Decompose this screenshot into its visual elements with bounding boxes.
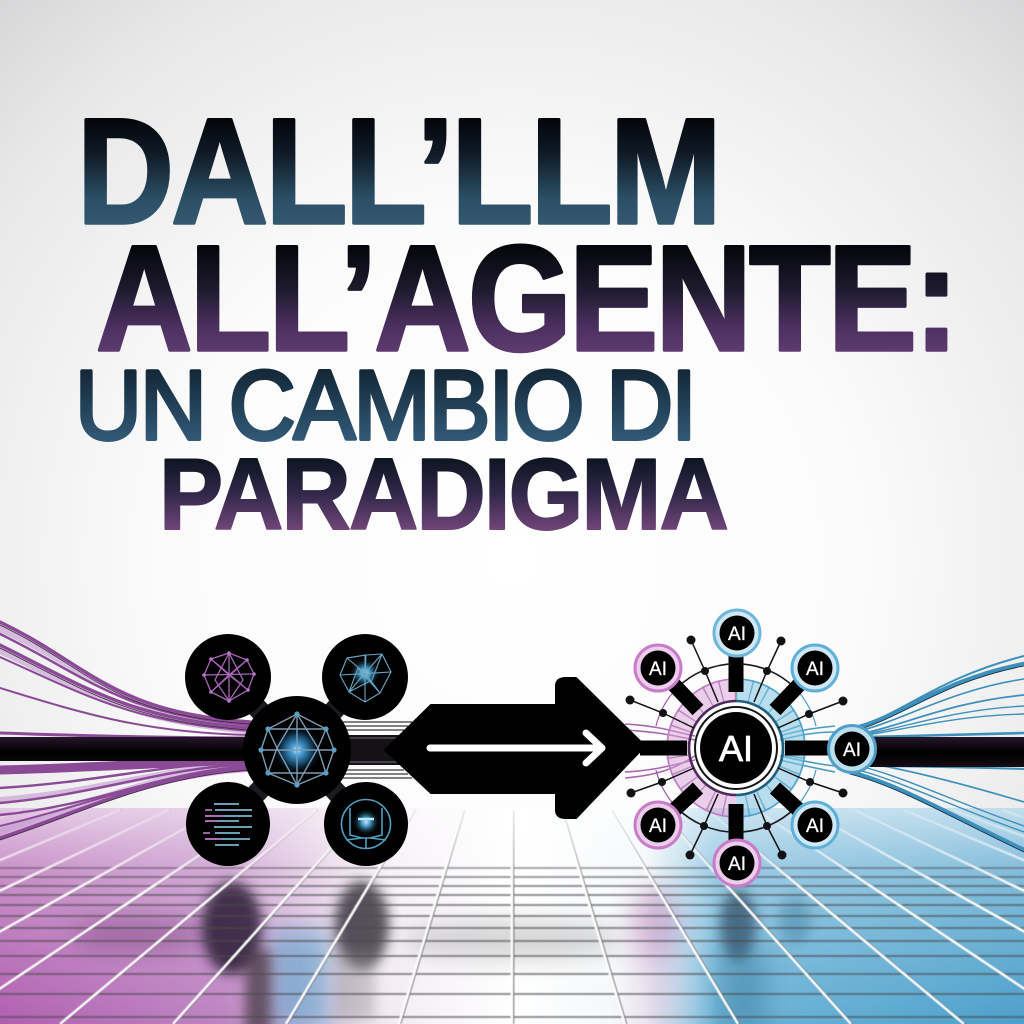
reflective floor grid	[0, 808, 1024, 1024]
AI node top: AI	[728, 624, 746, 645]
AI node bottom right: AI	[806, 816, 824, 837]
node: blue network	[322, 634, 408, 720]
title line 3: UN CAMBIO DI	[75, 350, 695, 460]
right blue data streams	[850, 656, 1024, 852]
node: centre polyhedron	[243, 696, 351, 804]
thick spokes	[640, 633, 852, 863]
connectors	[228, 677, 366, 824]
central AI node	[700, 712, 772, 784]
AI node top left	[635, 645, 681, 691]
satellite links	[630, 640, 843, 855]
satellite dots	[626, 636, 848, 860]
agent hub network	[625, 610, 876, 886]
node: blue chip	[324, 782, 408, 866]
AI node top left: AI	[649, 659, 667, 680]
AI node right: AI	[843, 740, 861, 761]
transformation arrow	[385, 678, 645, 818]
AI node bottom	[714, 840, 760, 886]
central black band left	[0, 737, 250, 761]
outer ring arcs	[656, 664, 816, 832]
title line 1: DALL’LLM	[77, 87, 719, 255]
LLM hub cluster	[185, 634, 408, 866]
left purple data streams	[0, 622, 250, 840]
node: text lines	[186, 782, 270, 866]
AI node bottom left	[635, 802, 681, 848]
central AI node: AI	[719, 728, 753, 769]
title line 4: PARADIGMA	[159, 439, 727, 551]
AI node top right	[792, 645, 838, 691]
title	[75, 87, 956, 551]
AI node top right: AI	[806, 659, 824, 680]
node: purple network	[185, 634, 271, 720]
AI node bottom: AI	[728, 854, 746, 875]
grey streams between hub and arrow	[340, 722, 412, 778]
hub stream lines	[625, 724, 695, 778]
AI node right	[828, 726, 876, 772]
white arrow line	[430, 733, 602, 763]
AI node bottom right	[792, 802, 838, 848]
segmented translucent ring	[667, 679, 805, 817]
AI node top	[714, 610, 760, 656]
AI node bottom left: AI	[649, 816, 667, 837]
